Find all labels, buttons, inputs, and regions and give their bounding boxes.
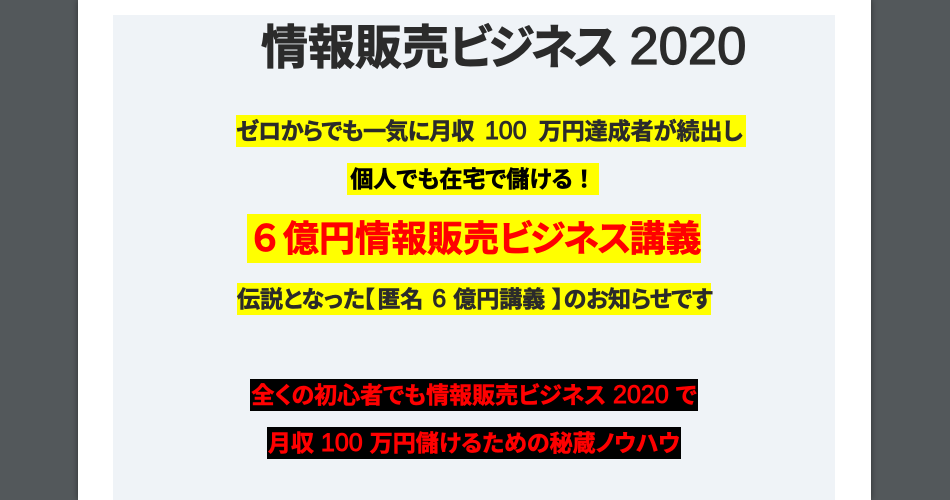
black banner line 1: 全くの初心者でも情報販売ビジネス 2020 で (251, 381, 697, 409)
content panel (113, 15, 835, 500)
title: 情報販売ビジネス 2020 (261, 17, 746, 76)
headline: yellow line 4: 伝説となった【匿名 6 億円講義 】のお知らせです (237, 285, 712, 313)
black banner line 2: 月収 100 万円儲けるための秘蔵ノウハウ (268, 429, 680, 457)
main headline: 6億円 lecture: ６億円情報販売ビジネス講義 (247, 218, 702, 259)
headline: yellow line 1: ゼロからでも一気に月収 100 万円達成者が続出し (236, 117, 743, 145)
headline: yellow line 2: 個人でも在宅で儲ける！ (350, 166, 596, 192)
